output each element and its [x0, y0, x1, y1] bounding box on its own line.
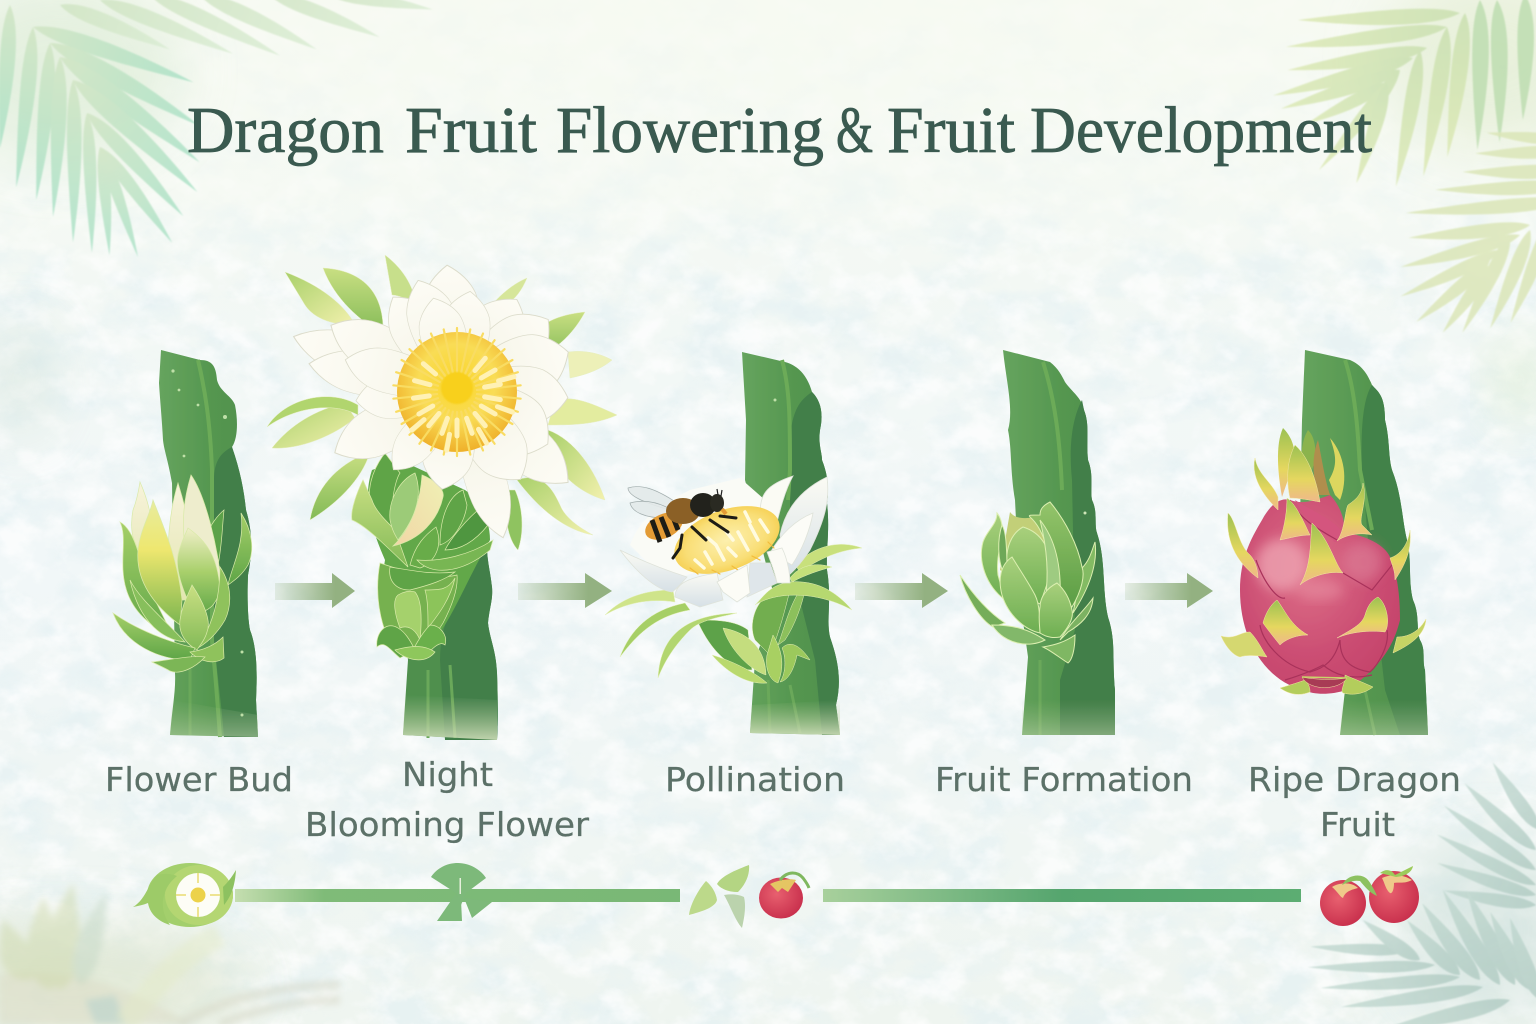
- label: night blooming flower: [305, 755, 589, 844]
- bud under flower: [352, 453, 493, 660]
- arrow 1: [275, 573, 355, 608]
- stem 4: [1003, 350, 1115, 735]
- icon: twin berries: [1320, 866, 1419, 926]
- stem 5: [1300, 350, 1428, 735]
- palm frond bottom-right: [1307, 759, 1536, 1024]
- palm frond top-right: [1271, 0, 1535, 188]
- stem 2: [400, 540, 498, 740]
- icon: three leaves: [689, 865, 749, 928]
- white petals: [287, 263, 584, 544]
- stage 1: flower bud: [113, 350, 258, 737]
- title: &: [836, 94, 873, 167]
- stem 1: [159, 350, 258, 737]
- label: pollination: Pollination: [665, 760, 845, 799]
- title: Flowering: [556, 94, 824, 167]
- stem 3: [742, 352, 840, 735]
- label: night blooming flower: Night: [402, 755, 493, 794]
- title: Development: [1030, 94, 1372, 167]
- stage 5: ripe dragon fruit: [1221, 350, 1428, 735]
- stage 3: pollination: [605, 352, 862, 735]
- stamens: [393, 328, 521, 456]
- arrow 4: [1125, 573, 1213, 608]
- label: fruit formation: Fruit Formation: [935, 760, 1193, 799]
- label: ripe dragon fruit: Fruit: [1320, 805, 1395, 844]
- sepals of flower: [267, 255, 617, 550]
- flower 3 petals: [620, 476, 828, 607]
- icon: green bow: [431, 863, 492, 921]
- icon: flower badge: [133, 863, 236, 927]
- bee: [628, 487, 736, 558]
- stage 2: night blooming flower: [267, 255, 617, 740]
- bud 1: [113, 475, 252, 672]
- title: [187, 94, 1372, 167]
- title: Fruit: [405, 94, 537, 167]
- title: Dragon: [187, 94, 384, 167]
- dragon fruit: [1221, 428, 1426, 694]
- palm foliage bottom-left: [0, 881, 340, 1024]
- label: night blooming flower: Blooming Flower: [305, 805, 589, 844]
- flower 3 sepals: [605, 544, 862, 678]
- arrow 2: [518, 573, 612, 608]
- timeline bar: [235, 889, 1301, 902]
- label: ripe dragon fruit: Ripe Dragon: [1248, 760, 1461, 799]
- title: Fruit: [887, 94, 1015, 167]
- label: flower bud: Flower Bud: [105, 760, 293, 799]
- stage 4: fruit formation: [960, 350, 1115, 735]
- lower bud 3: [712, 628, 810, 683]
- palm frond right: [1398, 128, 1536, 337]
- palm frond top-left: [0, 0, 434, 258]
- icon: single berry: [759, 873, 809, 918]
- label: ripe dragon fruit: [1248, 760, 1461, 844]
- arrow 3: [855, 573, 948, 608]
- fruit bud: [960, 502, 1096, 663]
